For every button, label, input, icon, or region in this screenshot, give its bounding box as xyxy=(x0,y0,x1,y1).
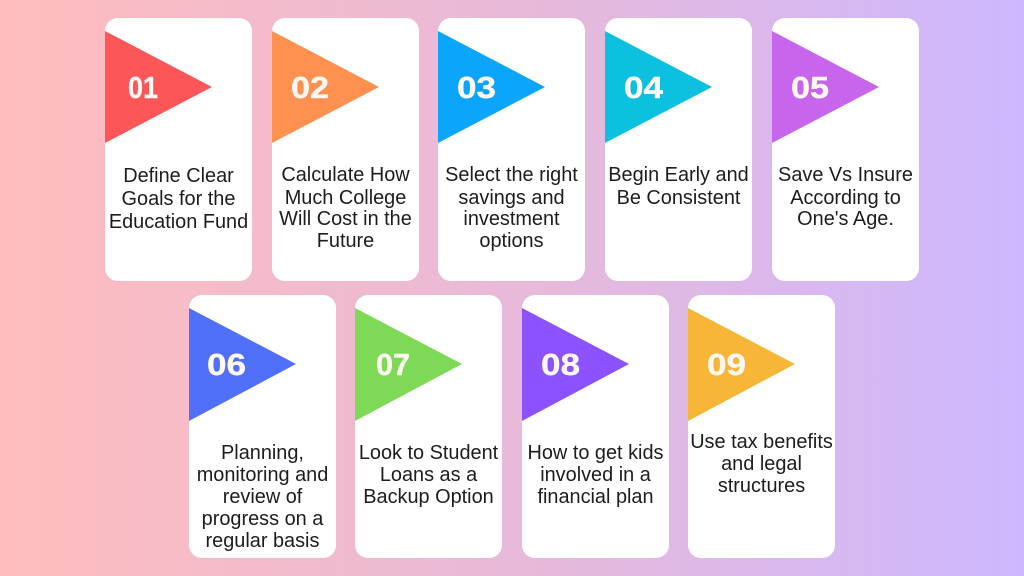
text: step 03 description: savings and xyxy=(458,187,565,209)
text: step 02 description xyxy=(279,164,412,252)
text: step 05 description xyxy=(778,164,913,230)
text: step 04 description xyxy=(608,164,749,209)
text: step 08 description: involved in a xyxy=(540,464,651,486)
icon: blue triangle with number 03: 03 xyxy=(457,70,496,105)
text: step 09 description xyxy=(690,431,833,497)
icon: purple triangle with number 05: 05 xyxy=(791,70,829,105)
text: step 03 description xyxy=(445,164,578,252)
text: step 03 description: Select the right xyxy=(445,164,578,186)
text: step 01 description: Education Fund xyxy=(109,211,248,233)
icon: blue triangle with number 06: 06 xyxy=(207,347,246,382)
icon: blue triangle with number 03 xyxy=(438,31,545,143)
icon: red triangle with number 01 xyxy=(105,31,212,143)
text: step 02 description: Calculate How xyxy=(281,164,410,186)
text: step 03 description: investment xyxy=(463,208,560,230)
text: step 07 description: Backup Option xyxy=(363,486,494,508)
text: step 06 description: review of xyxy=(223,486,302,508)
text: step 08 description: How to get kids xyxy=(528,442,663,464)
text: step 08 description xyxy=(528,442,663,508)
panel: step 01 xyxy=(105,18,252,281)
icon: green triangle with number 07 xyxy=(355,308,462,421)
panel: step 03 xyxy=(438,18,585,281)
text: step 06 description: progress on a xyxy=(202,508,323,530)
panel: step 06 xyxy=(189,295,336,558)
icon: blue triangle with number 06 xyxy=(189,308,296,421)
text: step 02 description: Future xyxy=(317,230,374,252)
icon: red triangle with number 01: 01 xyxy=(128,70,158,105)
text: step 09 description: structures xyxy=(718,475,805,497)
text: step 07 description xyxy=(359,442,498,508)
text: step 08 description: financial plan xyxy=(537,486,654,508)
panel: step 04 xyxy=(605,18,752,281)
text: step 02 description: Will Cost in the xyxy=(279,208,412,230)
icon: violet triangle with number 08 xyxy=(522,308,629,421)
text: step 06 description: Planning, xyxy=(221,442,304,464)
text: step 02 description: Much College xyxy=(285,187,406,209)
icon: green triangle with number 07: 07 xyxy=(376,347,410,382)
text: step 09 description: and legal xyxy=(721,453,802,475)
panel: step 09 xyxy=(688,295,835,558)
icon: purple triangle with number 05 xyxy=(772,31,879,143)
text: step 07 description: Loans as a xyxy=(380,464,477,486)
text: step 05 description: According to xyxy=(790,187,901,209)
text: step 05 description: Save Vs Insure xyxy=(778,164,913,186)
icon: orange triangle with number 02: 02 xyxy=(291,70,329,105)
text: step 03 description: options xyxy=(479,230,544,252)
panel: step 05 xyxy=(772,18,919,281)
panel: step 02 xyxy=(272,18,419,281)
icon: violet triangle with number 08: 08 xyxy=(541,347,580,382)
text: step 06 description: regular basis xyxy=(206,530,319,552)
icon: orange triangle with number 02 xyxy=(272,31,379,143)
icon: teal triangle with number 04: 04 xyxy=(624,70,664,105)
text: step 04 description: Begin Early and xyxy=(608,164,749,186)
text: step 07 description: Look to Student xyxy=(359,442,498,464)
text: step 09 description: Use tax benefits xyxy=(690,431,833,453)
text: step 01 description: Goals for the xyxy=(122,188,235,210)
text: step 04 description: Be Consistent xyxy=(617,187,740,209)
text: step 05 description: One's Age. xyxy=(797,208,894,230)
text: step 06 description: monitoring and xyxy=(197,464,328,486)
text: step 01 description xyxy=(109,165,248,233)
text: step 06 description xyxy=(197,442,328,552)
text: step 01 description: Define Clear xyxy=(123,165,234,187)
icon: yellow triangle with number 09: 09 xyxy=(707,347,746,382)
panel: step 07 xyxy=(355,295,502,558)
icon: teal triangle with number 04 xyxy=(605,31,712,143)
icon: yellow triangle with number 09 xyxy=(688,308,795,421)
panel: step 08 xyxy=(522,295,669,558)
